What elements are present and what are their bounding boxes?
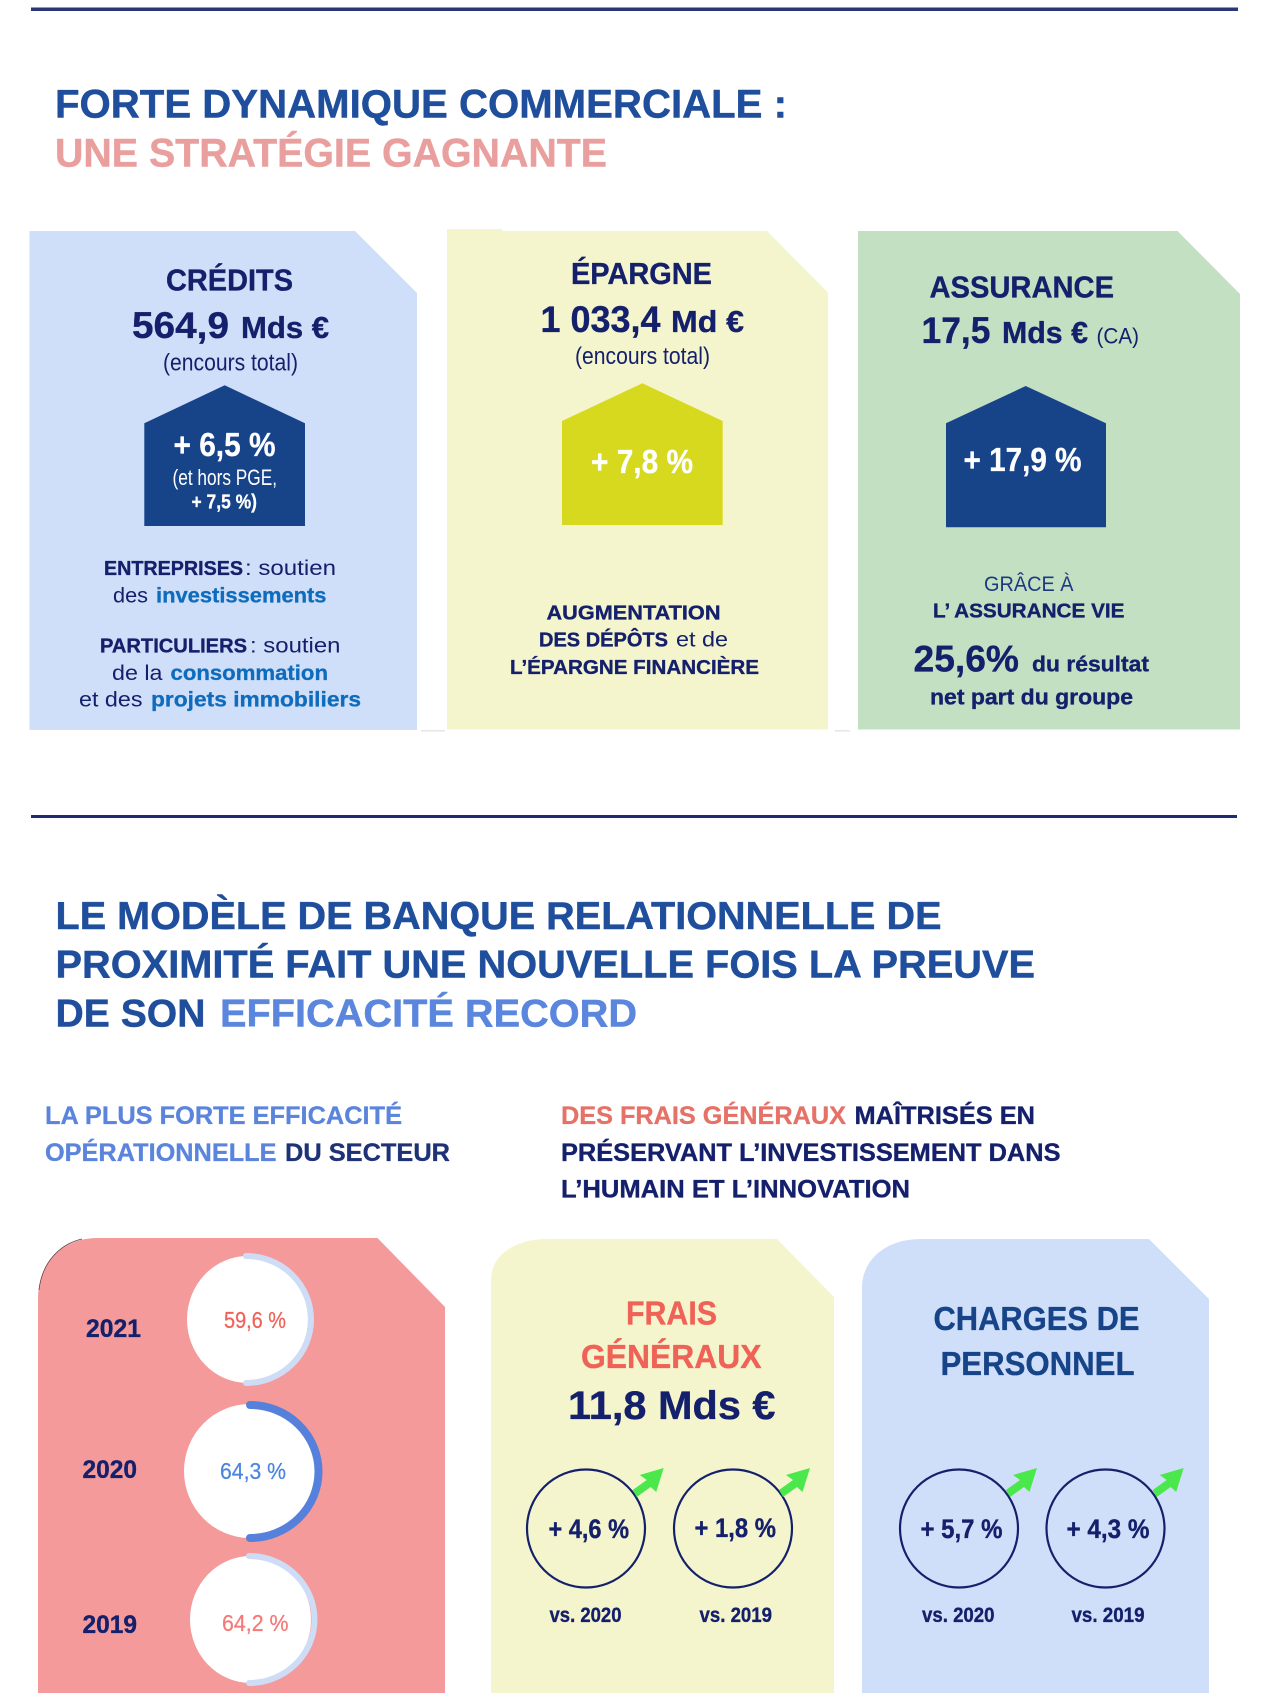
gauge 2020: 64,3 %: [220, 1458, 286, 1484]
gauge 2021: 2021: [86, 1315, 141, 1343]
title: le modèle de banque relationnelle: [56, 894, 1035, 1036]
subheading: frais généraux maîtrisés: L’HUMAIN ET L’INNOVATION: [561, 1175, 910, 1203]
text: 25,6 % du résultat: du résultat: [1032, 652, 1150, 676]
panel background: [38, 1238, 445, 1693]
panel background: [491, 1239, 834, 1693]
amount: Md €: [671, 304, 744, 339]
indicator vs. 2019: + 1,8 %: [694, 1513, 776, 1543]
gauge 2019: [82, 1556, 315, 1683]
panel: crédits: [30, 231, 417, 730]
text: entreprises: ENTREPRISES: [104, 557, 243, 580]
top divider: [31, 8, 1238, 11]
text: augmentation: AUGMENTATION: [546, 601, 720, 624]
indicator vs. 2020: [527, 1468, 664, 1627]
panel heading: PERSONNEL: [940, 1345, 1134, 1382]
house badge: + 6,5 %: [174, 426, 276, 463]
text: particuliers: projets immobiliers: [151, 689, 361, 712]
panel background: [447, 229, 828, 730]
panel: épargne: [447, 229, 828, 730]
note: (encours total): [163, 350, 298, 376]
text: grâce à l'assurance vie: GRÂCE À: [984, 573, 1074, 596]
title: forte dynamique commerciale: UNE STRATÉGIE GAGNANTE: [55, 130, 607, 176]
amount: [922, 310, 1139, 351]
indicator vs. 2020: vs. 2020: [922, 1604, 994, 1627]
panel heading: GÉNÉRAUX: [581, 1338, 762, 1375]
subheading: efficacité opérationnelle: OPÉRATIONNELLE: [45, 1138, 276, 1167]
title: le modèle de banque relationnelle: LE MODÈLE DE BANQUE RELATIONNELLE DE: [56, 894, 942, 938]
gauge 2019: 64,2 %: [222, 1610, 288, 1636]
house badge: [562, 383, 723, 525]
text: particuliers: consommation: [170, 662, 328, 685]
panel: charges de personnel: [862, 1239, 1209, 1693]
text: augmentation: L’ÉPARGNE FINANCIÈRE: [510, 656, 759, 679]
text: particuliers: de la: [112, 662, 163, 685]
amount: Mds €: [241, 310, 329, 345]
title: forte dynamique commerciale: [55, 82, 787, 176]
amount: 564,9: [132, 305, 229, 346]
indicator vs. 2020: + 4,6 %: [548, 1514, 629, 1544]
house badge: + 7,5 %): [192, 491, 257, 513]
text: entreprises: investissements: [156, 584, 326, 607]
title: le modèle de banque relationnelle: EFFICACITÉ RECORD: [220, 992, 637, 1036]
subheading: frais généraux maîtrisés: [561, 1100, 1060, 1203]
subheading: efficacité opérationnelle: [45, 1101, 450, 1167]
indicator vs. 2019: [1046, 1468, 1184, 1627]
amount: Mds €: [1002, 315, 1088, 350]
panel background: [862, 1239, 1209, 1693]
indicator vs. 2020: [900, 1468, 1037, 1627]
text: 25,6 % du résultat: [914, 638, 1150, 709]
subheading: frais généraux maîtrisés: DES FRAIS GÉNÉRAUX: [561, 1101, 846, 1130]
text: augmentation: et de: [676, 629, 728, 652]
house badge: + 7,8 %: [591, 443, 693, 480]
indicator vs. 2019: + 4,3 %: [1066, 1514, 1150, 1544]
text: entreprises: [104, 557, 336, 607]
panel heading: [934, 1300, 1140, 1382]
amount: 11,8 Mds €: [568, 1384, 776, 1428]
house badge: + 17,9 %: [964, 441, 1082, 478]
text: 25,6 % du résultat: 25,6%: [914, 638, 1019, 680]
panel: assurance: [858, 231, 1240, 730]
middle divider: [31, 815, 1237, 818]
text: augmentation: [510, 601, 759, 679]
text: grâce à l'assurance vie: [933, 573, 1124, 623]
title: le modèle de banque relationnelle: DE SON: [56, 992, 206, 1036]
amount: 1 033,4: [540, 299, 661, 340]
text: augmentation: DES DÉPÔTS: [539, 628, 668, 652]
panel: coefficient d'exploitation: [38, 1238, 445, 1693]
gauge 2020: 2020: [82, 1456, 137, 1484]
amount: (CA): [1096, 323, 1139, 348]
panel heading: CHARGES DE: [934, 1300, 1140, 1337]
gauge 2021: [86, 1256, 311, 1383]
subheading: efficacité opérationnelle: DU SECTEUR: [285, 1139, 450, 1167]
indicator vs. 2020: + 5,7 %: [920, 1514, 1002, 1544]
indicator vs. 2019: [674, 1468, 810, 1627]
text: particuliers: PARTICULIERS: [100, 635, 247, 658]
house badge: [144, 385, 305, 526]
panel heading: FRAIS: [626, 1294, 717, 1332]
text: particuliers: et des: [79, 689, 142, 712]
panel heading: [581, 1294, 762, 1375]
title: le modèle de banque relationnelle: PROXIMITÉ FAIT UNE NOUVELLE FOIS LA PREUVE: [56, 942, 1035, 986]
text: entreprises: des: [113, 584, 148, 607]
panel heading: ASSURANCE: [930, 270, 1114, 304]
amount: [540, 299, 744, 340]
text: particuliers: [79, 635, 361, 712]
text: 25,6 % du résultat: net part du groupe: [930, 684, 1133, 709]
amount: [132, 305, 329, 346]
panel heading: CRÉDITS: [166, 262, 293, 298]
subheading: frais généraux maîtrisés: PRÉSERVANT L’INVESTISSEMENT DANS: [561, 1138, 1060, 1167]
house badge: [946, 386, 1106, 527]
amount: 17,5: [922, 310, 990, 351]
indicator vs. 2020: vs. 2020: [550, 1604, 622, 1627]
panel background: [858, 231, 1240, 730]
indicator vs. 2019: vs. 2019: [1072, 1604, 1144, 1627]
subheading: efficacité opérationnelle: LA PLUS FORTE EFFICACITÉ: [45, 1101, 402, 1130]
subheading: frais généraux maîtrisés: MAÎTRISÉS EN: [854, 1100, 1035, 1130]
panel: frais généraux: [491, 1239, 834, 1693]
panel background: [30, 231, 417, 730]
text: entreprises: : soutien: [245, 557, 336, 580]
text: grâce à l'assurance vie: L’ ASSURANCE VIE: [933, 600, 1124, 623]
panel heading: ÉPARGNE: [571, 256, 712, 291]
house badge: (et hors PGE,: [172, 465, 277, 490]
gauge 2019: 2019: [82, 1611, 137, 1639]
title: forte dynamique commerciale: FORTE DYNAMIQUE COMMERCIALE :: [55, 82, 787, 126]
gauge 2021: 59,6 %: [224, 1307, 286, 1333]
note: (encours total): [575, 343, 710, 370]
text: particuliers: : soutien: [250, 635, 340, 658]
indicator vs. 2019: vs. 2019: [700, 1604, 772, 1627]
gauge 2020: [82, 1404, 319, 1538]
